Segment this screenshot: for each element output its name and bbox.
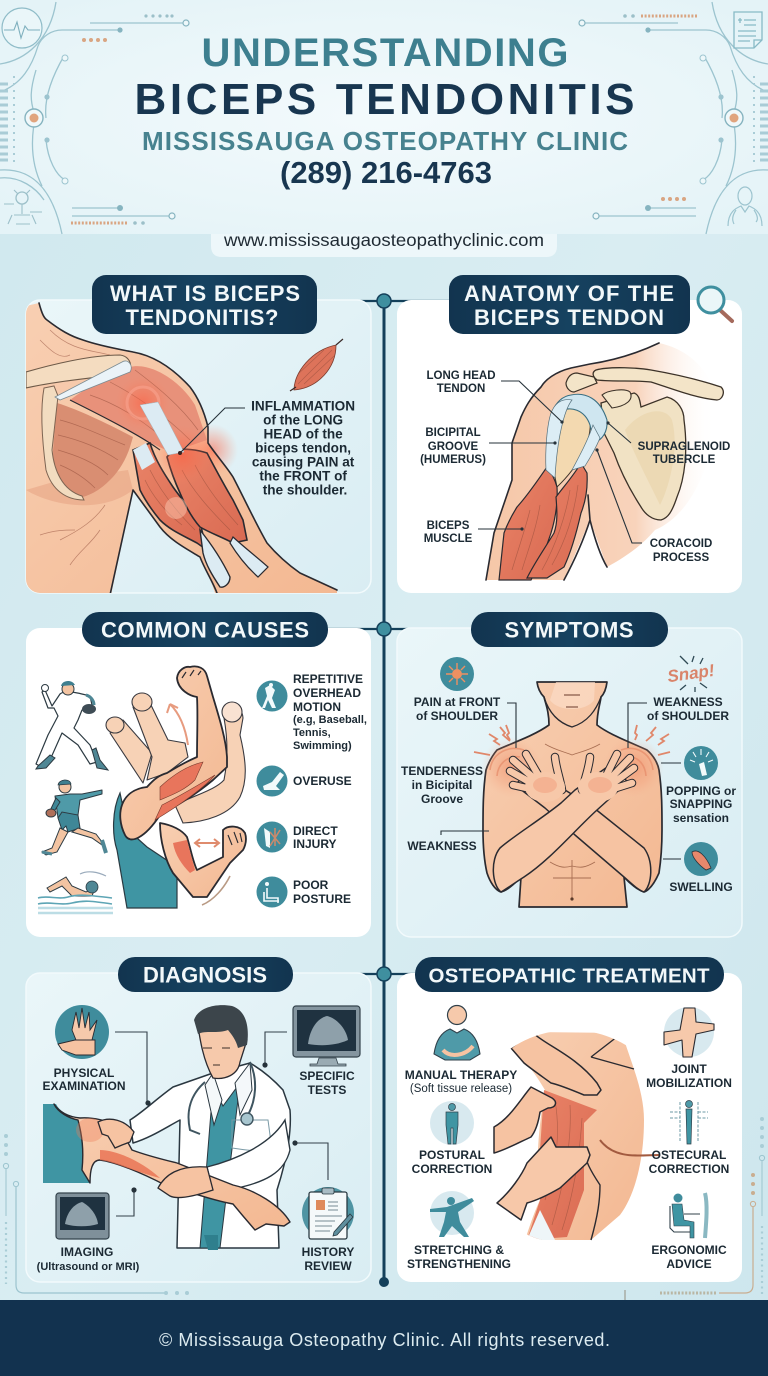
scapula	[601, 393, 686, 520]
text: diagnosis: EXAMINATION	[42, 1079, 126, 1093]
text: causes: MOTION	[293, 700, 341, 714]
labels: LONG HEAD	[426, 370, 496, 382]
callout lines	[478, 381, 642, 543]
illustration: anatomy	[486, 343, 723, 580]
icon: doctor	[728, 187, 762, 226]
text: treatment: MOBILIZATION	[646, 1076, 732, 1090]
labels: TUBERCLE	[653, 454, 716, 466]
labels: TENDON	[437, 383, 485, 395]
hand fingers left	[510, 754, 562, 790]
heading: osteopathic treatment	[415, 957, 724, 992]
icon: imaging	[56, 1193, 109, 1239]
footer	[0, 1300, 768, 1376]
text: treatment	[405, 1062, 732, 1271]
text: symptoms: of SHOULDER	[647, 709, 729, 723]
panel: anatomy of the biceps tendon	[397, 275, 742, 593]
tendons	[140, 402, 184, 455]
heading: anatomy: ANATOMY OF THE	[464, 281, 674, 306]
text: treatment: ERGONOMIC	[651, 1243, 727, 1257]
heading: what is biceps tendonitis: TENDONITIS?	[126, 305, 278, 330]
arm: toward left shoulder	[515, 770, 651, 892]
text: causes: OVERUSE	[293, 774, 352, 788]
website pill	[211, 230, 557, 257]
heading: anatomy: BICEPS TENDON	[474, 305, 664, 330]
text: treatment: (Soft tissue release)	[410, 1083, 512, 1095]
text: causes: POSTURE	[293, 892, 351, 906]
icon: postural correction	[430, 1101, 474, 1145]
icon: repetitive motion	[256, 680, 288, 712]
inflammation glow	[122, 382, 162, 424]
clavicle	[593, 368, 723, 400]
deltoid	[70, 366, 207, 452]
short head	[133, 443, 207, 550]
text: inflammation: HEAD of the	[263, 426, 343, 442]
panel: what is biceps tendonitis	[26, 275, 371, 600]
text: treatment: ADVICE	[666, 1257, 712, 1271]
icon: ergonomic	[670, 1193, 707, 1238]
coat	[130, 1063, 290, 1248]
hands	[98, 1119, 134, 1148]
text: treatment: STRETCHING &	[414, 1243, 504, 1257]
text: treatment: STRENGTHENING	[407, 1257, 511, 1271]
text: causes: OVERHEAD	[293, 686, 361, 700]
title	[134, 31, 634, 190]
hand fingers right	[582, 754, 634, 790]
text: symptoms: WEAKNESS	[407, 839, 477, 853]
panel: diagnosis	[26, 957, 371, 1282]
icon: manual therapy	[434, 1006, 480, 1060]
icon: physical examination	[55, 1005, 109, 1059]
icon: baseball pitcher	[36, 681, 108, 770]
arm: toward right shoulder	[493, 765, 628, 892]
text: inflammation: the shoulder.	[263, 482, 347, 498]
text: treatment: CORRECTION	[412, 1162, 492, 1176]
icon: overuse	[256, 766, 288, 796]
decorative lower circuit	[3, 1117, 765, 1300]
labels	[420, 370, 730, 564]
pain sparks	[474, 725, 670, 755]
illustration: torso	[114, 666, 246, 908]
decorative circuit right	[579, 2, 768, 234]
humerus	[553, 408, 590, 487]
labels: SUPRAGLENOID	[638, 441, 730, 453]
icon: stretching	[430, 1191, 474, 1237]
text: inflammation: biceps tendon,	[255, 440, 351, 456]
text: symptoms: SWELLING	[669, 880, 733, 894]
heading: symptoms: SYMPTOMS	[504, 618, 634, 642]
illustration: doctor examining patient	[43, 1005, 290, 1250]
text: symptoms: PAIN at FRONT	[414, 695, 501, 709]
icon: swelling	[684, 842, 718, 876]
illustration: treatment	[494, 1032, 660, 1240]
heading: common causes	[82, 612, 328, 647]
text: diagnosis: REVIEW	[304, 1259, 352, 1273]
heading: symptoms	[471, 612, 668, 647]
labels: PROCESS	[653, 552, 709, 564]
text: causes: POOR	[293, 878, 329, 892]
icon: poor posture	[256, 876, 288, 908]
callout line	[178, 408, 245, 455]
scapula	[42, 386, 84, 500]
icon: popping	[684, 746, 718, 780]
text: diagnosis: HISTORY	[302, 1245, 354, 1259]
text: diagnosis: TESTS	[308, 1083, 346, 1097]
text: symptoms: sensation	[673, 811, 729, 825]
text: causes: DIRECT	[293, 824, 338, 838]
labels: (HUMERUS)	[420, 454, 486, 466]
illustration: ghost arms	[106, 693, 245, 823]
text: diagnosis: SPECIFIC	[299, 1069, 355, 1083]
icon: magnifier	[698, 287, 732, 321]
decorative circuit left	[0, 2, 189, 234]
text: causes	[293, 672, 367, 906]
text: symptoms: of SHOULDER	[416, 709, 498, 723]
text: treatment: CORRECTION	[649, 1162, 729, 1176]
labels: BICIPITAL	[425, 427, 481, 439]
header band	[0, 0, 768, 234]
patient arm	[54, 1104, 290, 1230]
long head	[167, 449, 247, 543]
text: diagnosis: (Ultrasound or MRI)	[37, 1261, 140, 1273]
title: UNDERSTANDING	[202, 31, 568, 75]
title: (289) 216-4763	[280, 155, 492, 190]
sleeve	[207, 1120, 290, 1192]
tendon strands	[546, 400, 572, 478]
callout lines	[441, 703, 681, 859]
labels: MUSCLE	[424, 533, 473, 545]
text: symptoms: POPPING or	[666, 784, 736, 798]
text: treatment: POSTURAL	[419, 1148, 485, 1162]
panel: common causes	[26, 612, 371, 937]
humeral head	[552, 394, 607, 443]
muscles	[499, 467, 557, 580]
heading: what is biceps tendonitis: WHAT IS BICEPS	[110, 281, 300, 306]
labels: BICEPS	[427, 520, 470, 532]
icon: runner	[42, 780, 106, 855]
text: causes: INJURY	[293, 837, 337, 851]
text: inflammation: causing PAIN at	[252, 454, 355, 470]
illustration: torso with crossed arms	[481, 682, 664, 907]
callout lines	[115, 1032, 328, 1216]
website pill: www.mississaugaosteopathyclinic.com	[223, 230, 544, 250]
text: symptoms: TENDERNESS	[401, 764, 483, 778]
text: inflammation: INFLAMMATION	[251, 398, 355, 414]
icon: ostecural	[670, 1100, 708, 1144]
arrow: double arrow	[195, 839, 219, 847]
text: causes: REPETITIVE	[293, 672, 363, 686]
text: inflammation: the FRONT of	[259, 468, 347, 484]
title: BICEPS TENDONITIS	[134, 75, 634, 124]
icon: joint mobilization	[664, 1007, 714, 1057]
text: symptoms: SNAPPING	[670, 797, 732, 811]
panel: symptoms	[397, 612, 742, 937]
icon: snap: Snap!	[666, 661, 716, 686]
icon: ultrasound monitor	[293, 1006, 360, 1066]
icon: document	[734, 12, 762, 48]
text: inflammation: of the LONG	[263, 412, 343, 428]
icon: pain burst	[440, 657, 474, 691]
footer: © Mississauga Osteopathy Clinic. All rights reserved.	[159, 1330, 610, 1350]
text: causes: (e.g, Baseball,	[293, 714, 367, 726]
icon: direct injury	[256, 822, 288, 852]
text: treatment: JOINT	[671, 1062, 707, 1076]
chest muscle	[53, 403, 133, 497]
text: treatment: OSTECURAL	[652, 1148, 726, 1162]
heading: osteopathic treatment: OSTEOPATHIC TREATMENT	[428, 964, 710, 988]
text: symptoms: Groove	[421, 792, 463, 806]
timeline connector	[293, 294, 471, 1287]
heading: what is biceps tendonitis	[92, 275, 317, 334]
heading: diagnosis	[118, 957, 293, 992]
text: causes: Tennis,	[293, 727, 331, 739]
head	[197, 1016, 247, 1078]
heading: diagnosis: DIAGNOSIS	[143, 962, 267, 988]
icon: swimmer	[38, 872, 113, 913]
text: causes: Swimming)	[293, 740, 352, 752]
text: treatment: MANUAL THERAPY	[405, 1068, 517, 1082]
text: diagnosis	[37, 1066, 355, 1273]
text: diagnosis: PHYSICAL	[54, 1066, 114, 1080]
lower arm	[160, 823, 246, 897]
stethoscope	[189, 1062, 255, 1134]
text: symptoms	[401, 695, 736, 894]
title: MISSISSAUGA OSTEOPATHY CLINIC	[142, 126, 628, 156]
heading: anatomy	[449, 275, 690, 334]
illustration: shoulder and biceps	[26, 303, 337, 600]
heading: common causes: COMMON CAUSES	[101, 618, 309, 642]
icon: muscle	[290, 339, 343, 391]
icon: clipboard	[302, 1187, 354, 1239]
labels: CORACOID	[650, 538, 712, 550]
text: symptoms: WEAKNESS	[653, 695, 723, 709]
raised arm	[120, 666, 227, 839]
labels: GROOVE	[428, 441, 479, 453]
curved motion mark	[202, 876, 230, 905]
patient top	[43, 1104, 90, 1183]
panel: osteopathic treatment	[397, 957, 742, 1282]
text: symptoms: in Bicipital	[412, 778, 472, 792]
text: diagnosis: IMAGING	[61, 1245, 113, 1259]
